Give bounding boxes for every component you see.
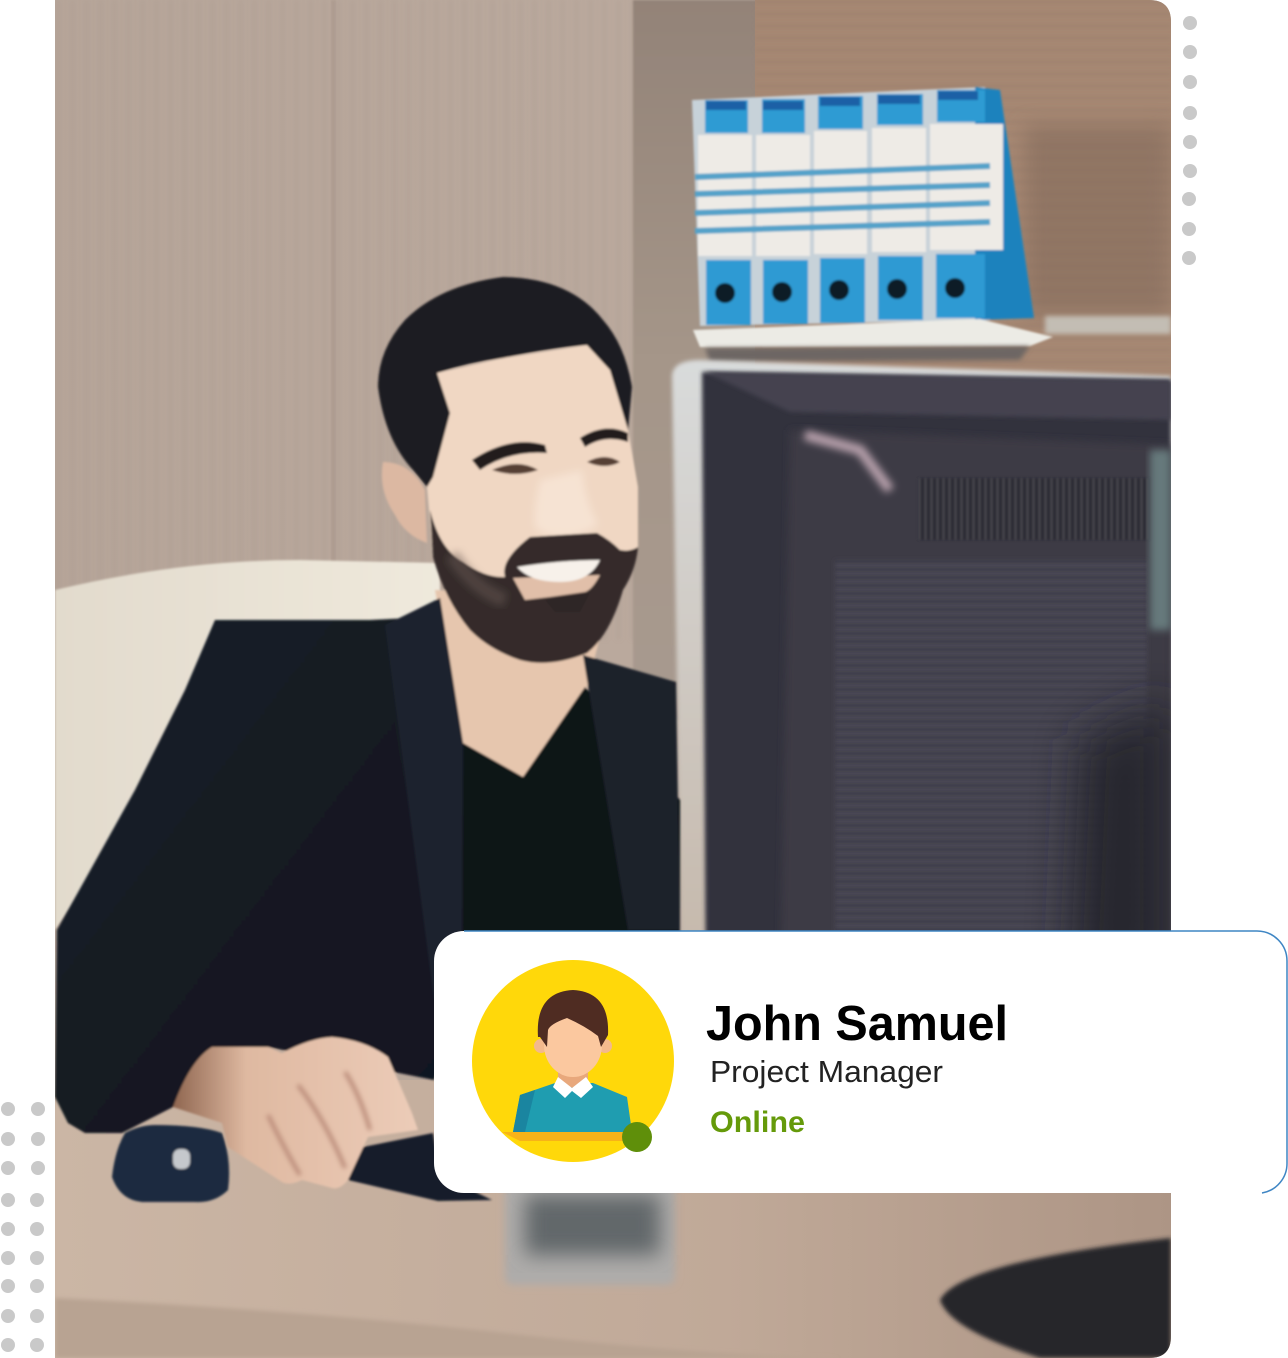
decorative dots: bottom left [1, 1102, 45, 1352]
eyebrows [472, 442, 547, 470]
shelf with blue binders [692, 87, 1171, 362]
nose shadow [535, 472, 595, 535]
black blazer [55, 598, 463, 1133]
chin skin patch [513, 575, 600, 600]
avatar neck [558, 1060, 588, 1088]
keyboard [348, 1133, 492, 1201]
binder spine tabs [705, 90, 985, 133]
avatar icon [472, 960, 674, 1162]
binder frame [692, 87, 990, 326]
neck [435, 590, 610, 777]
avatar collar [553, 1077, 593, 1098]
binder white labels [698, 124, 1003, 256]
office chair [55, 560, 440, 930]
computer monitor [670, 358, 1171, 930]
hand on mouse [173, 1037, 418, 1188]
beard [430, 510, 638, 663]
black t-shirt [461, 686, 682, 931]
avatar ears [534, 1039, 548, 1053]
goatee [545, 593, 590, 612]
man figure [55, 277, 680, 1202]
binder side panel [975, 87, 1034, 320]
profile card [434, 931, 1287, 1193]
desk [55, 1080, 1171, 1358]
ear [382, 462, 427, 543]
binder lower panels [706, 254, 985, 325]
avatar hair [538, 990, 608, 1047]
smile [517, 560, 600, 582]
decorative dots: top right [1182, 16, 1197, 265]
status dot [622, 1122, 652, 1152]
avatar face [544, 1013, 602, 1077]
face [426, 343, 640, 579]
name: John Samuel [706, 997, 1008, 1051]
hair [378, 277, 632, 487]
glass jar [504, 1193, 676, 1286]
mouse [112, 1125, 229, 1202]
avatar shirt [513, 1083, 632, 1132]
job title: Project Manager [710, 1054, 943, 1089]
eyes [492, 464, 538, 474]
avatar desk shadow [502, 1132, 630, 1141]
online status: Online [710, 1106, 805, 1139]
